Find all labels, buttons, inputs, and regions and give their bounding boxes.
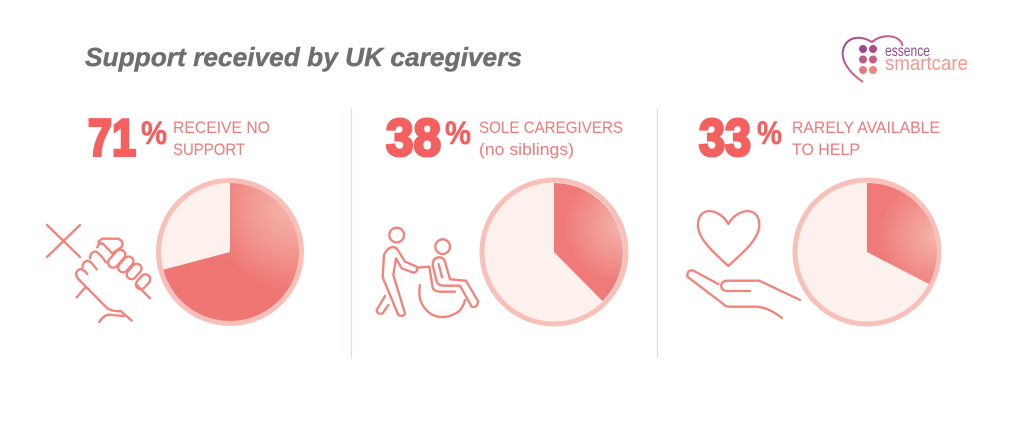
label: rarely available to help: [792, 118, 940, 159]
label: receive no support: RECEIVE NO: [173, 118, 270, 137]
label: receive no support: SUPPORT: [173, 140, 245, 159]
stat: 33%: 33: [699, 110, 751, 168]
icon: clasped hands: [76, 239, 152, 322]
divider left: [350, 108, 352, 358]
icon: cross: [47, 225, 80, 257]
stat: 38%: 38: [386, 110, 441, 168]
logo: essence smartcare: essence: [885, 43, 930, 60]
pie chart: 33%: [795, 180, 939, 324]
logo: essence smartcare: [843, 36, 968, 82]
stat: 71%: %: [141, 115, 167, 151]
stat: 71%: 71: [88, 110, 136, 168]
label: receive no support: [173, 118, 270, 159]
icon: caregiver pushing wheelchair: [377, 228, 478, 317]
panel: 33 percent rarely available: [687, 110, 940, 324]
stat: 38%: [386, 110, 471, 168]
pie chart: 38%: [482, 180, 626, 324]
logo: essence smartcare: smartcare: [885, 53, 968, 75]
stat: 33%: [699, 110, 782, 168]
label: sole caregivers (no siblings): [479, 118, 623, 159]
stat: 33%: %: [757, 115, 782, 151]
icon: hand holding heart: [687, 211, 800, 318]
label: sole caregivers (no siblings): SOLE CAREGIVERS: [479, 118, 623, 137]
panel: 71 percent receive no support: [47, 110, 302, 324]
title: Support received by UK caregivers: [85, 42, 522, 72]
stat: 38%: %: [445, 115, 471, 151]
pie chart: 71%: [158, 180, 302, 324]
label: rarely available to help: TO HELP: [792, 140, 860, 159]
label: rarely available to help: RARELY AVAILABLE: [792, 118, 940, 137]
label: sole caregivers (no siblings): (no siblings): [479, 140, 574, 159]
panel: 38 percent sole caregivers: [377, 110, 626, 324]
divider right: [656, 108, 658, 358]
